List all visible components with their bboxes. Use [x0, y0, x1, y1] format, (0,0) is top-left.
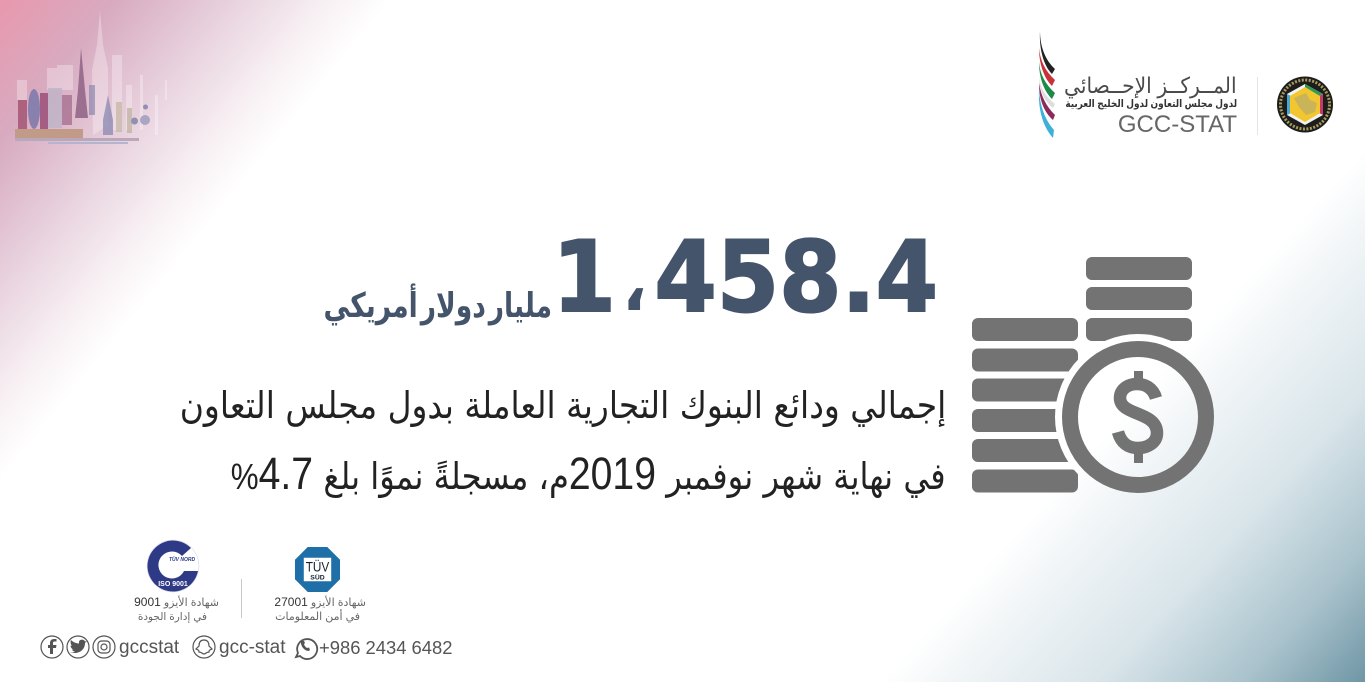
social icons — [40, 635, 318, 660]
logo Arabic subtitle: لدول مجلس التعاون لدول الخليج العربية — [1065, 98, 1237, 110]
icon: TUV Nord seal: TÜV NORD — [169, 556, 195, 563]
description line 2: في نهاية شهر نوفمبر 2019م، مسجلةً نموًا بلغ 4.7% — [231, 448, 946, 499]
text: gccstat: gccstat — [119, 637, 179, 658]
badge: TUV Nord ISO 9001 — [134, 540, 219, 623]
caption: شهادة الأيزو 9001 — [134, 595, 219, 609]
icon: TUV Sud octagon: SÜD — [310, 572, 325, 581]
emblem: GCC seal — [1277, 76, 1333, 132]
logo GCC-STAT wordmark: GCC-STAT — [1118, 111, 1237, 138]
logo: GCC-STAT — [1038, 32, 1237, 138]
icon: TUV Sud octagon — [294, 547, 340, 592]
headline: unit: مليار دولار أمريكي — [323, 286, 552, 326]
caption line 2: في إدارة الجودة — [138, 611, 207, 623]
text: gcc-stat: gcc-stat — [219, 637, 286, 658]
Arabic comma: ، — [622, 249, 647, 326]
headline: value — [552, 221, 938, 335]
description line 1: إجمالي ودائع البنوك التجارية العاملة بدول مجلس التعاون — [179, 384, 946, 427]
icon: TUV Nord seal — [146, 540, 200, 592]
icon: TUV Nord seal: ISO 9001 — [158, 581, 188, 588]
text: phone: +986 2434 6482 — [319, 637, 452, 658]
badge: TUV Sud ISO 27001 — [274, 547, 366, 623]
icon: TUV Sud octagon: TÜV — [306, 559, 330, 574]
divider — [1257, 77, 1258, 135]
icon: coin stacks — [972, 257, 1214, 493]
caption: شهادة الأيزو 27001 — [274, 595, 366, 609]
caption line 2: في أمن المعلومات — [275, 611, 360, 623]
social contact row — [40, 635, 452, 660]
divider — [241, 579, 242, 618]
digits 458.4: 458.4 — [654, 221, 938, 335]
digit 1: 1 — [552, 221, 616, 335]
icon: city skyline — [15, 12, 167, 144]
logo Arabic name: المــركــز الإحــصائي — [1064, 73, 1237, 98]
logo ribbon — [1038, 32, 1055, 138]
